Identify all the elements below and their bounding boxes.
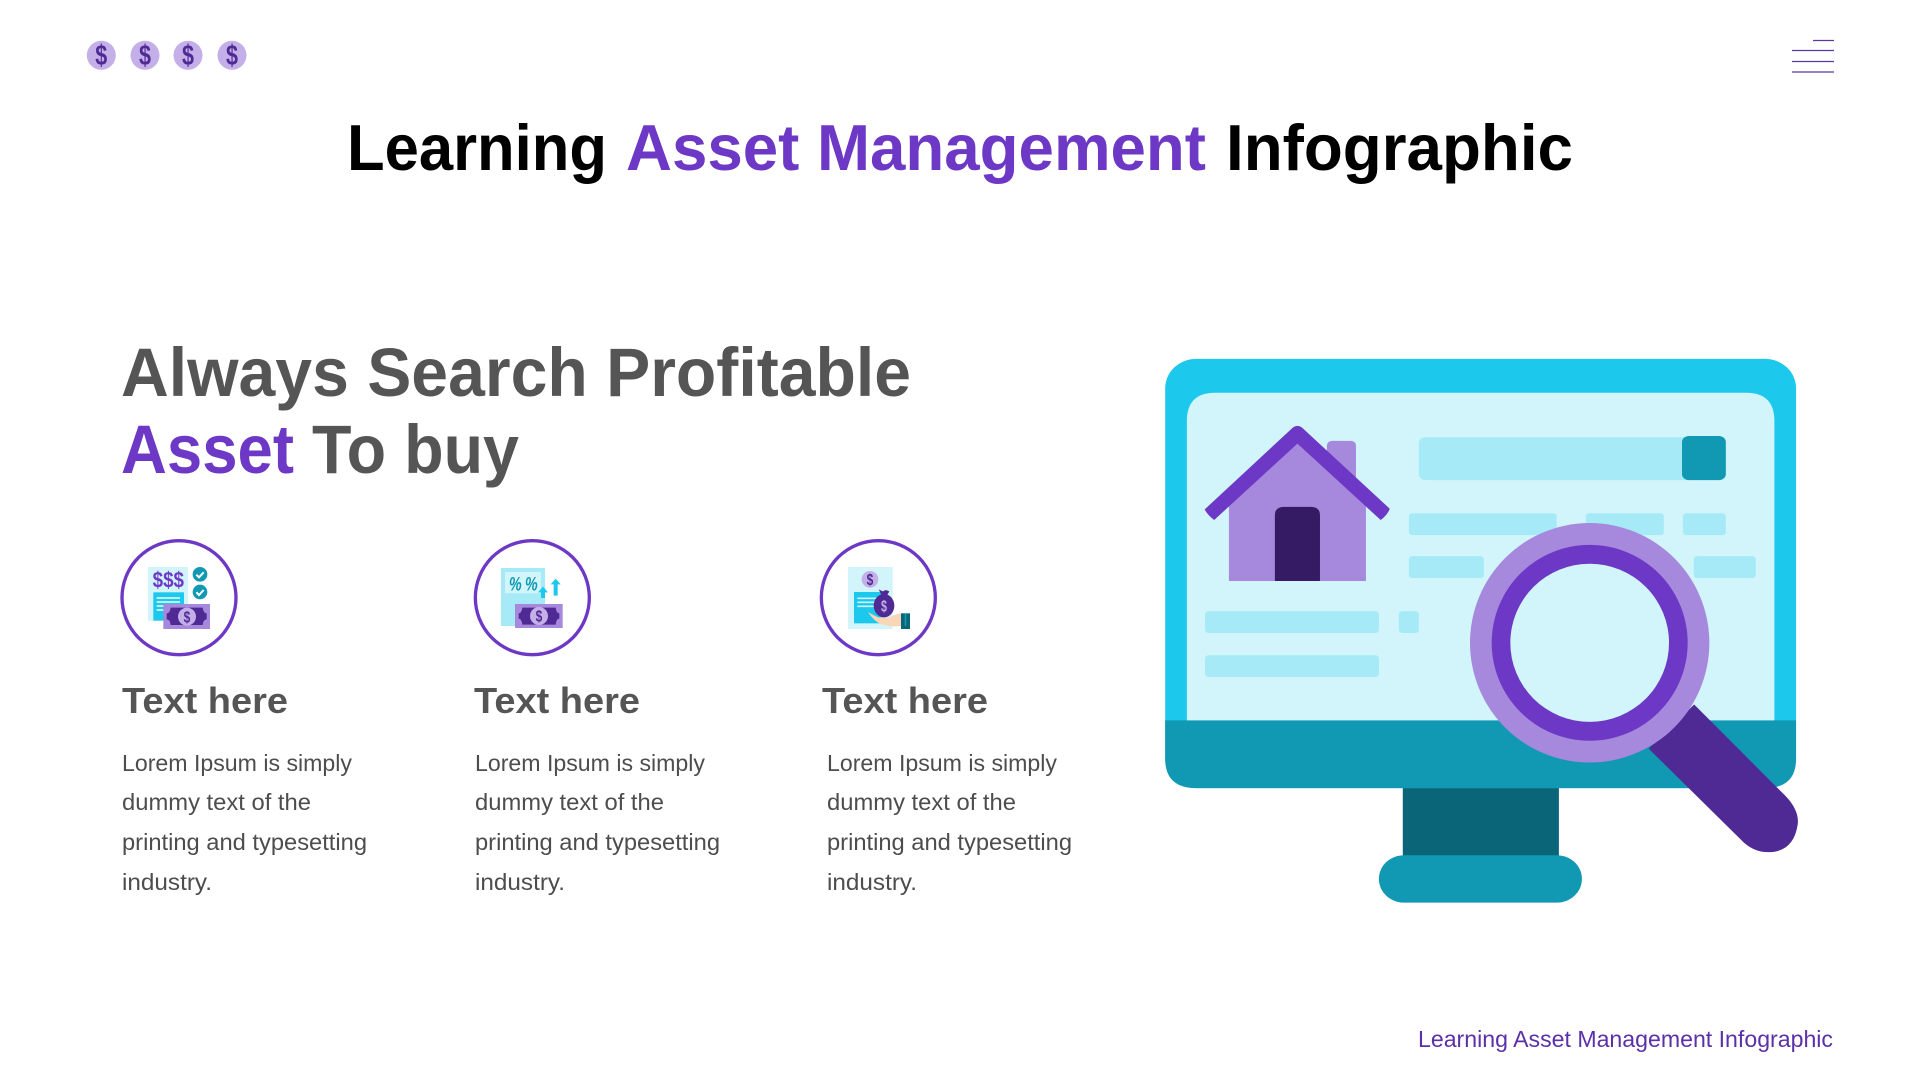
column 1: icon and text bbox=[122, 541, 367, 895]
icon: document with dollars and checks: $ bbox=[184, 609, 190, 626]
icon row: dollar coins: $ bbox=[139, 40, 151, 72]
heading bbox=[121, 334, 911, 488]
body text: printing and typesetting bbox=[827, 829, 1072, 855]
body text: Lorem Ipsum is simply bbox=[827, 750, 1057, 776]
icon: percent rates with money bbox=[475, 541, 589, 655]
footer text: Learning Asset Management Infographic bbox=[1418, 1026, 1833, 1052]
body text: industry. bbox=[827, 869, 917, 895]
title bbox=[347, 111, 1573, 184]
illustration: monitor with house listing and magnifier bbox=[1165, 359, 1798, 903]
icon row: dollar coins: $ bbox=[182, 40, 194, 72]
title: Learning bbox=[347, 111, 607, 184]
listing rows bbox=[1205, 513, 1756, 677]
body text: printing and typesetting bbox=[475, 829, 720, 855]
icon: hand holding money bag: $ bbox=[867, 572, 873, 589]
body text: industry. bbox=[475, 869, 565, 895]
body text bbox=[475, 750, 720, 895]
icon row: dollar coins bbox=[87, 40, 246, 72]
search bar bbox=[1419, 436, 1726, 480]
icon row: dollar coins: $ bbox=[226, 40, 238, 72]
icon: menu lines bbox=[1792, 40, 1834, 72]
body text: Lorem Ipsum is simply bbox=[122, 750, 352, 776]
subheading: Text here bbox=[122, 680, 288, 721]
icon: document with dollars and checks bbox=[122, 541, 236, 655]
icon: hand holding money bag: $ bbox=[881, 598, 887, 615]
body text bbox=[122, 750, 367, 895]
icon: percent rates with money: % bbox=[509, 575, 522, 596]
subheading: Text here bbox=[474, 680, 640, 721]
monitor body bbox=[1165, 359, 1796, 788]
column 3: icon and text bbox=[821, 541, 1072, 895]
body text: printing and typesetting bbox=[122, 829, 367, 855]
heading: Asset bbox=[121, 411, 294, 488]
title: Infographic bbox=[1226, 111, 1573, 184]
icon row: dollar coins: $ bbox=[95, 40, 107, 72]
body text: dummy text of the bbox=[475, 789, 664, 815]
icon: percent rates with money: $ bbox=[536, 609, 542, 626]
subheading: Text here bbox=[822, 680, 988, 721]
column 2: icon and text bbox=[474, 541, 720, 895]
monitor stand bbox=[1379, 784, 1582, 903]
icon: percent rates with money: % bbox=[525, 575, 538, 596]
icon: house bbox=[1205, 426, 1390, 581]
body text: industry. bbox=[122, 869, 212, 895]
body text: Lorem Ipsum is simply bbox=[475, 750, 705, 776]
body text: dummy text of the bbox=[827, 789, 1016, 815]
heading: To buy bbox=[312, 411, 519, 488]
body text bbox=[827, 750, 1072, 895]
icon: document with dollars and checks: $$$ bbox=[153, 567, 184, 592]
heading: Always Search Profitable bbox=[121, 334, 911, 411]
title: Asset Management bbox=[626, 111, 1206, 184]
icon: hand holding money bag bbox=[821, 541, 935, 655]
icon: magnifying glass bbox=[1470, 523, 1798, 852]
body text: dummy text of the bbox=[122, 789, 311, 815]
